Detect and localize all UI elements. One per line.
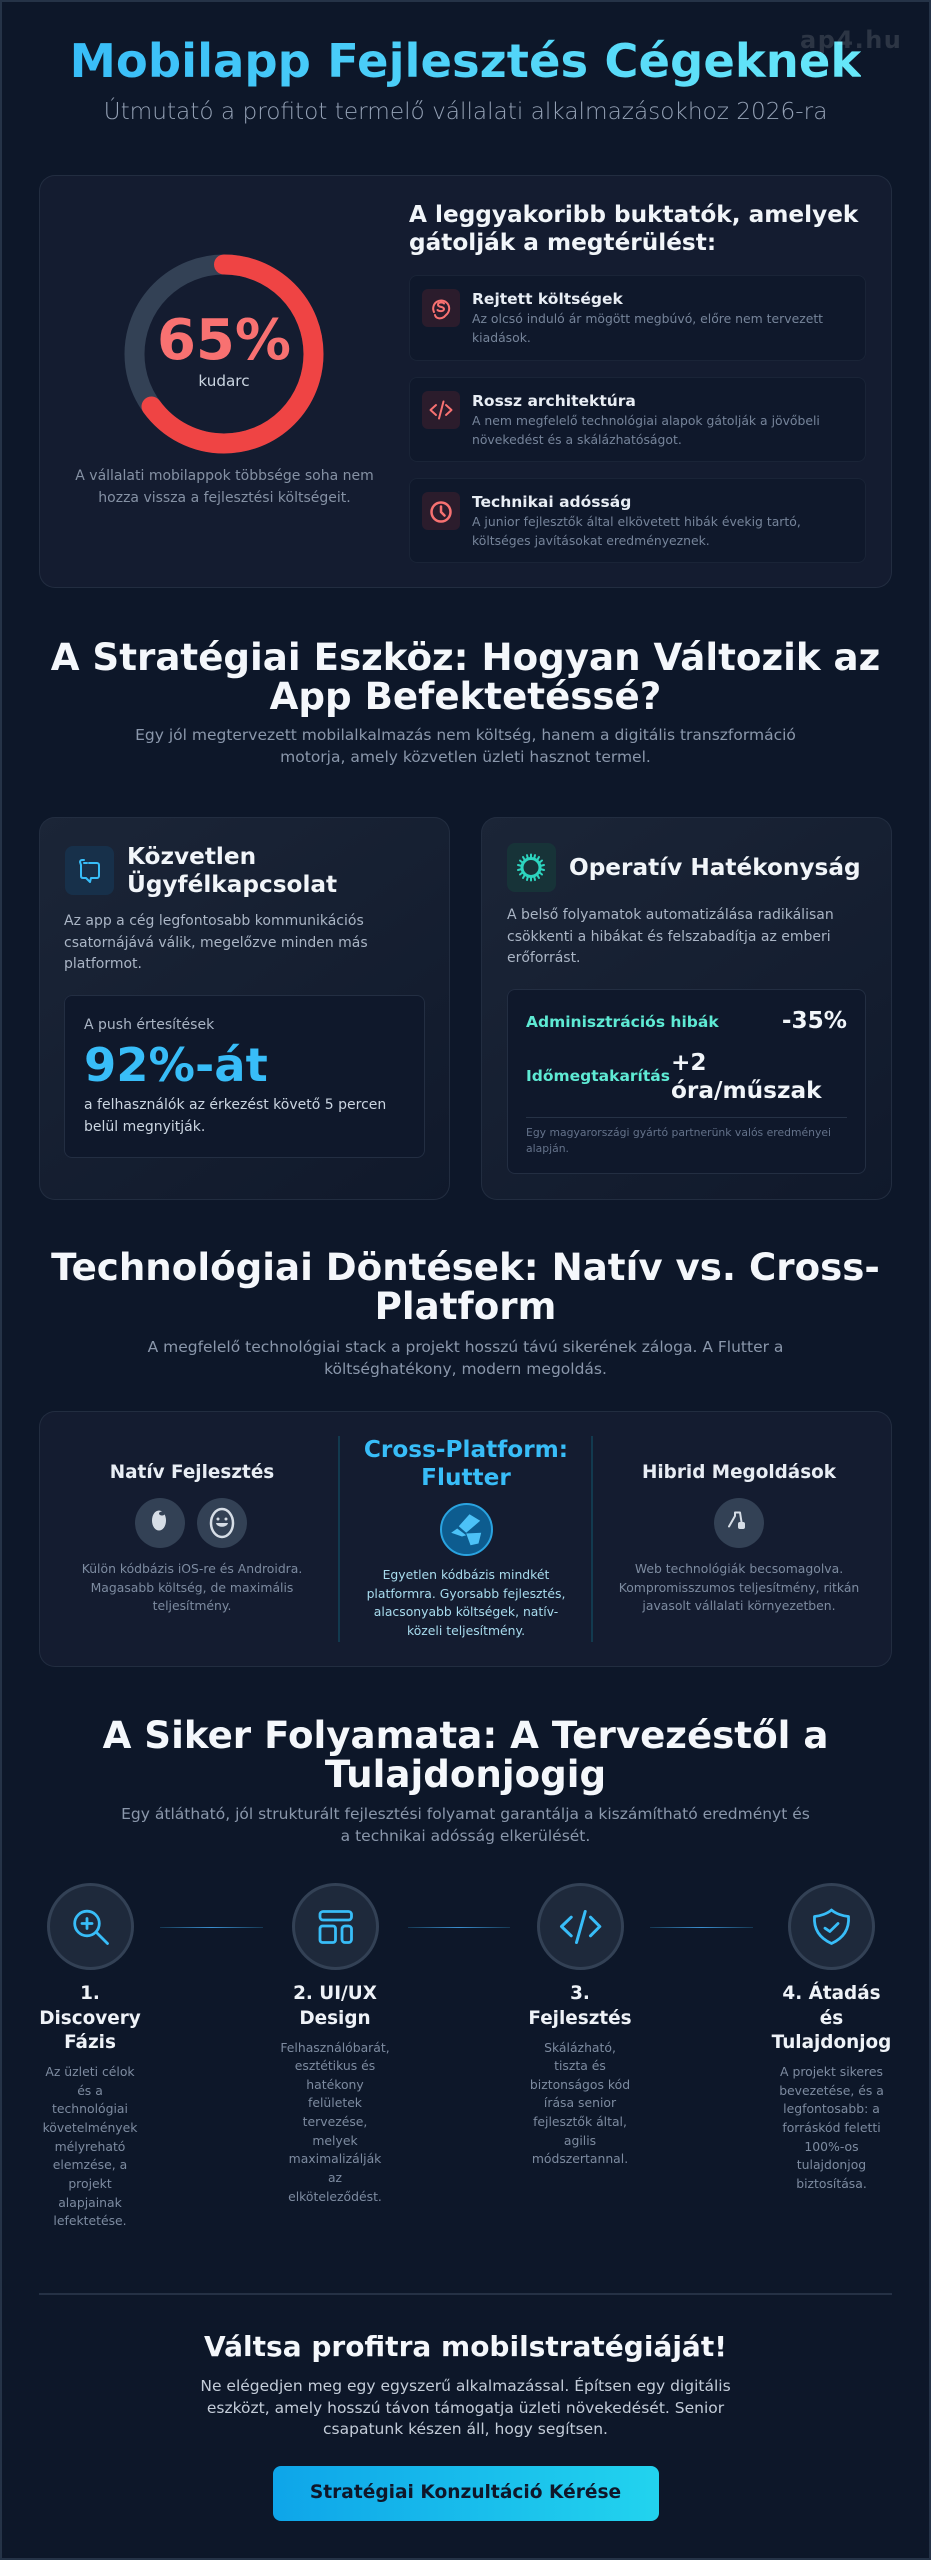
icon: step 3 code — [536, 1883, 624, 1970]
step description: esztétikus és — [295, 2058, 375, 2073]
pitfalls heading: gátolják a megtérülést: — [409, 229, 716, 256]
column description: közeli teljesítmény. — [407, 1623, 525, 1638]
icon: hybrid — [714, 1498, 764, 1548]
heading: strategic asset: App Befektetéssé? — [270, 674, 661, 718]
step description: az — [328, 2170, 342, 2185]
step description — [280, 2040, 390, 2204]
panel: direct customer contact — [39, 817, 450, 1200]
step description: felületek — [308, 2095, 362, 2110]
column title: Flutter — [421, 1464, 511, 1491]
pitfall description — [472, 311, 823, 345]
heading: process — [102, 1713, 828, 1796]
card description: platformot. — [64, 956, 142, 972]
pitfall description: költséges javításokat eredményeznek. — [472, 533, 710, 548]
heading: strategic asset — [51, 635, 880, 718]
step description: melyek — [312, 2133, 358, 2148]
pitfall: bad architecture — [409, 377, 866, 462]
column description: Külön kódbázis iOS-re és Androidra. — [82, 1561, 302, 1576]
column description: alacsonyabb költségek, natív- — [374, 1604, 558, 1619]
call to action text — [200, 2377, 731, 2438]
stat box: results — [507, 989, 866, 1174]
call to action text: Ne elégedjen meg egy egyszerű alkalmazással. Építsen egy digitális — [200, 2377, 731, 2395]
step description: A projekt sikeres — [780, 2064, 883, 2079]
step description: bevezetése, és a — [779, 2083, 884, 2098]
step description: és a — [77, 2083, 103, 2098]
icon: code — [422, 391, 460, 429]
step 3 text — [528, 1983, 632, 2166]
stat label: Időmegtakarítás — [526, 1067, 670, 1085]
icon: clock — [422, 492, 460, 530]
icon: chat bubble — [65, 846, 114, 895]
heading: process: Tulajdonjogig — [325, 1752, 606, 1796]
pitfall description — [472, 514, 801, 548]
step title: Design — [299, 2008, 371, 2029]
pitfall description: A nem megfelelő technológiai alapok gátolják a jövőbeli — [472, 413, 820, 428]
panel: operational efficiency — [481, 817, 892, 1200]
card description: erőforrást. — [507, 950, 581, 966]
stat description: belül megnyitják. — [84, 1119, 205, 1135]
step title: Tulajdonjog — [772, 2032, 891, 2053]
donut caption: hozza vissza a fejlesztési költségeit. — [98, 490, 351, 506]
step title — [528, 1983, 632, 2029]
heading: technology decisions — [51, 1245, 880, 1328]
step title: Fejlesztés — [528, 2008, 632, 2029]
icon: android — [197, 1498, 247, 1548]
section intro: process: a technikai adósság elkerülését. — [341, 1827, 590, 1845]
column description — [367, 1567, 565, 1638]
card title: Operatív Hatékonyság — [569, 854, 861, 881]
section intro: technology — [148, 1338, 783, 1378]
step description: tiszta és — [554, 2058, 606, 2073]
call to action text: eszközt, amely hosszú távon támogatja üzleti növekedését. Senior — [207, 2399, 724, 2417]
step title: 1. — [80, 1983, 100, 2004]
call to action button — [272, 2466, 658, 2521]
icon: hidden cost — [422, 289, 460, 327]
pitfall: hidden costs — [409, 275, 866, 361]
section intro: process: Egy átlátható, jól strukturált fejlesztési folyamat garantálja a kiszámítható eredményt és — [121, 1805, 810, 1823]
step 4 text — [772, 1982, 891, 2191]
column: hybrid — [619, 1462, 859, 1613]
step title — [39, 1983, 141, 2053]
step description — [43, 2064, 138, 2228]
card description: csatornájává válik, megelőzve minden más — [64, 935, 368, 951]
stat value: +2 — [671, 1049, 707, 1076]
icon: step 4 shield — [788, 1883, 875, 1970]
column description: Web technológiák becsomagolva. — [635, 1561, 843, 1576]
arrow: step 2 to 3 — [408, 1927, 510, 1928]
step description: agilis — [564, 2133, 596, 2148]
step description: mélyreható — [55, 2139, 125, 2154]
call to action heading: Váltsa profitra mobilstratégiáját! — [204, 2330, 727, 2363]
icon: step 1 search — [46, 1883, 134, 1970]
column description: javasolt vállalati környezetben. — [642, 1598, 836, 1613]
pitfalls heading: A leggyakoribb buktatók, amelyek — [409, 201, 858, 228]
column description: platformra. Gyorsabb fejlesztés, — [367, 1586, 565, 1601]
arrow: step 1 to 2 — [160, 1927, 263, 1928]
stat value: óra/műszak — [671, 1076, 822, 1104]
step title: 3. — [570, 1983, 590, 2004]
step description: Skálázható, — [544, 2040, 616, 2054]
step description: biztonságos kód — [530, 2077, 630, 2092]
step description: tulajdonjog — [797, 2157, 866, 2172]
step description — [779, 2064, 884, 2191]
stat value: 92%-át — [84, 1038, 268, 1092]
divider left — [338, 1436, 340, 1642]
stat label: Adminisztrációs hibák — [526, 1013, 719, 1031]
heading: technology decisions: Technológiai Döntések: Natív vs. Cross- — [51, 1245, 880, 1289]
card description — [507, 907, 834, 966]
donut caption: A vállalati mobilappok többsége soha nem — [75, 468, 374, 484]
heading: strategic asset: A Stratégiai Eszköz: Hogyan Változik az — [51, 635, 880, 679]
stat description — [84, 1097, 386, 1135]
pitfall description: növekedést és a skálázhatóságot. — [472, 432, 682, 447]
watermark: ap4.hu — [800, 26, 902, 54]
step description: biztosítása. — [796, 2176, 867, 2191]
donut chart: 65% failure — [124, 254, 324, 454]
stat footnote: alapján. — [526, 1142, 569, 1154]
card description: A belső folyamatok automatizálása radikálisan — [507, 907, 834, 923]
call to action text: csapatunk készen áll, hogy segítsen. — [323, 2420, 608, 2438]
section intro: technology: költséghatékony, modern megoldás. — [324, 1360, 607, 1378]
icon: step 2 layout — [292, 1883, 378, 1970]
section intro: strategic asset: motorja, amely közvetlen üzleti hasznot termel. — [280, 748, 651, 766]
column title — [364, 1436, 568, 1491]
column: native — [82, 1462, 302, 1613]
column title: Cross-Platform: — [364, 1436, 568, 1463]
step description: legfontosabb: a — [783, 2101, 880, 2116]
title: Mobilapp Fejlesztés Cégeknek — [70, 34, 861, 88]
icon: gear chip — [507, 843, 556, 892]
separator — [39, 2293, 892, 2295]
step description: fejlesztők által, — [533, 2114, 627, 2129]
donut chart: 65% failure: kudarc — [198, 372, 250, 390]
step title: 2. UI/UX — [293, 1983, 377, 2004]
step title — [293, 1983, 377, 2029]
step description: projekt — [68, 2176, 112, 2191]
step description: maximalizálják — [289, 2151, 381, 2166]
call to action button: Stratégiai Konzultáció Kérése — [310, 2482, 621, 2503]
step description: Felhasználóbarát, — [280, 2040, 390, 2054]
stat value: -35% — [782, 1007, 847, 1034]
column description: Kompromisszumos teljesítmény, ritkán — [619, 1580, 859, 1595]
step title — [772, 1982, 891, 2053]
column description: Egyetlen kódbázis mindkét — [383, 1567, 549, 1582]
step description: technológiai — [52, 2101, 128, 2116]
subtitle: Útmutató a profitot termelő vállalati alkalmazásokhoz 2026-ra — [104, 98, 827, 125]
column description: teljesítmény. — [153, 1598, 231, 1613]
card title: Közvetlen — [127, 843, 256, 870]
step 1 text — [39, 1983, 141, 2228]
card title: Ügyfélkapcsolat — [127, 871, 337, 898]
section intro: strategic asset — [135, 726, 796, 766]
step description: követelmények — [43, 2120, 137, 2135]
step description: tervezése, — [303, 2114, 367, 2129]
heading: process: A Siker Folyamata: A Tervezéstől a — [103, 1713, 828, 1757]
step description: elemzése, a — [53, 2157, 127, 2172]
icon: apple — [135, 1498, 185, 1548]
panel: failure rate and pitfalls — [39, 175, 892, 588]
stat description: a felhasználók az érkezést követő 5 percen — [84, 1097, 386, 1113]
card description: csökkenti a hibákat és felszabadítja az emberi — [507, 929, 831, 945]
panel: technology comparison — [39, 1411, 892, 1667]
card description: Az app a cég legfontosabb kommunikációs — [64, 913, 364, 929]
column description — [82, 1561, 302, 1613]
column title: Natív Fejlesztés — [110, 1462, 274, 1483]
section intro: strategic asset: Egy jól megtervezett mobilalkalmazás nem költség, hanem a digitális transzformáció — [135, 726, 796, 744]
step description: alapjainak — [58, 2195, 122, 2210]
column description: Magasabb költség, de maximális — [91, 1580, 293, 1595]
step description: elköteleződést. — [288, 2189, 382, 2204]
step description: 100%-os — [804, 2139, 859, 2154]
pitfall title: Rejtett költségek — [472, 290, 623, 308]
step description: lefektetése. — [53, 2213, 127, 2228]
stat value — [671, 1049, 822, 1104]
pitfall: technical debt — [409, 478, 866, 563]
step title: 4. Átadás — [782, 1983, 881, 2004]
step description — [530, 2040, 630, 2166]
column description — [619, 1561, 859, 1613]
step description: forráskód feletti — [782, 2120, 881, 2135]
step title: és — [820, 2008, 843, 2029]
step description: Az üzleti célok — [45, 2064, 135, 2079]
stat box: push notifications — [64, 995, 425, 1158]
stat label: A push értesítések — [84, 1017, 214, 1033]
pitfalls heading — [409, 201, 859, 256]
section intro: process — [121, 1805, 810, 1845]
pitfall description: kiadások. — [472, 330, 531, 345]
step 2 text — [280, 1983, 390, 2204]
pitfall title: Technikai adósság — [472, 493, 631, 511]
step title: Discovery — [39, 2008, 141, 2029]
step description: írása senior — [544, 2095, 616, 2110]
step description: hatékony — [306, 2077, 364, 2092]
donut chart: 65% failure: 65% — [157, 308, 291, 373]
pitfall title: Rossz architektúra — [472, 392, 636, 410]
divider right — [591, 1436, 593, 1642]
column title: Hibrid Megoldások — [642, 1462, 836, 1483]
column: flutter — [364, 1436, 568, 1638]
arrow: step 3 to 4 — [650, 1927, 753, 1928]
card title — [127, 843, 337, 898]
pitfall description: A junior fejlesztők által elkövetett hibák évekig tartó, — [472, 514, 801, 529]
card description — [64, 913, 368, 972]
icon: flutter — [440, 1503, 492, 1556]
step description: módszertannal. — [532, 2151, 628, 2166]
pitfall description — [472, 413, 820, 447]
pitfall description: Az olcsó induló ár mögött megbúvó, előre nem tervezett — [472, 311, 823, 326]
stat footnote: Egy magyarországi gyártó partnerünk valós eredményei — [526, 1126, 831, 1139]
donut caption — [75, 468, 374, 506]
heading: technology decisions: Platform — [375, 1284, 556, 1328]
section intro: technology: A megfelelő technológiai stack a projekt hosszú távú sikerének záloga. A Flutter a — [148, 1338, 783, 1356]
step title: Fázis — [64, 2032, 116, 2053]
stat footnote — [526, 1117, 847, 1156]
